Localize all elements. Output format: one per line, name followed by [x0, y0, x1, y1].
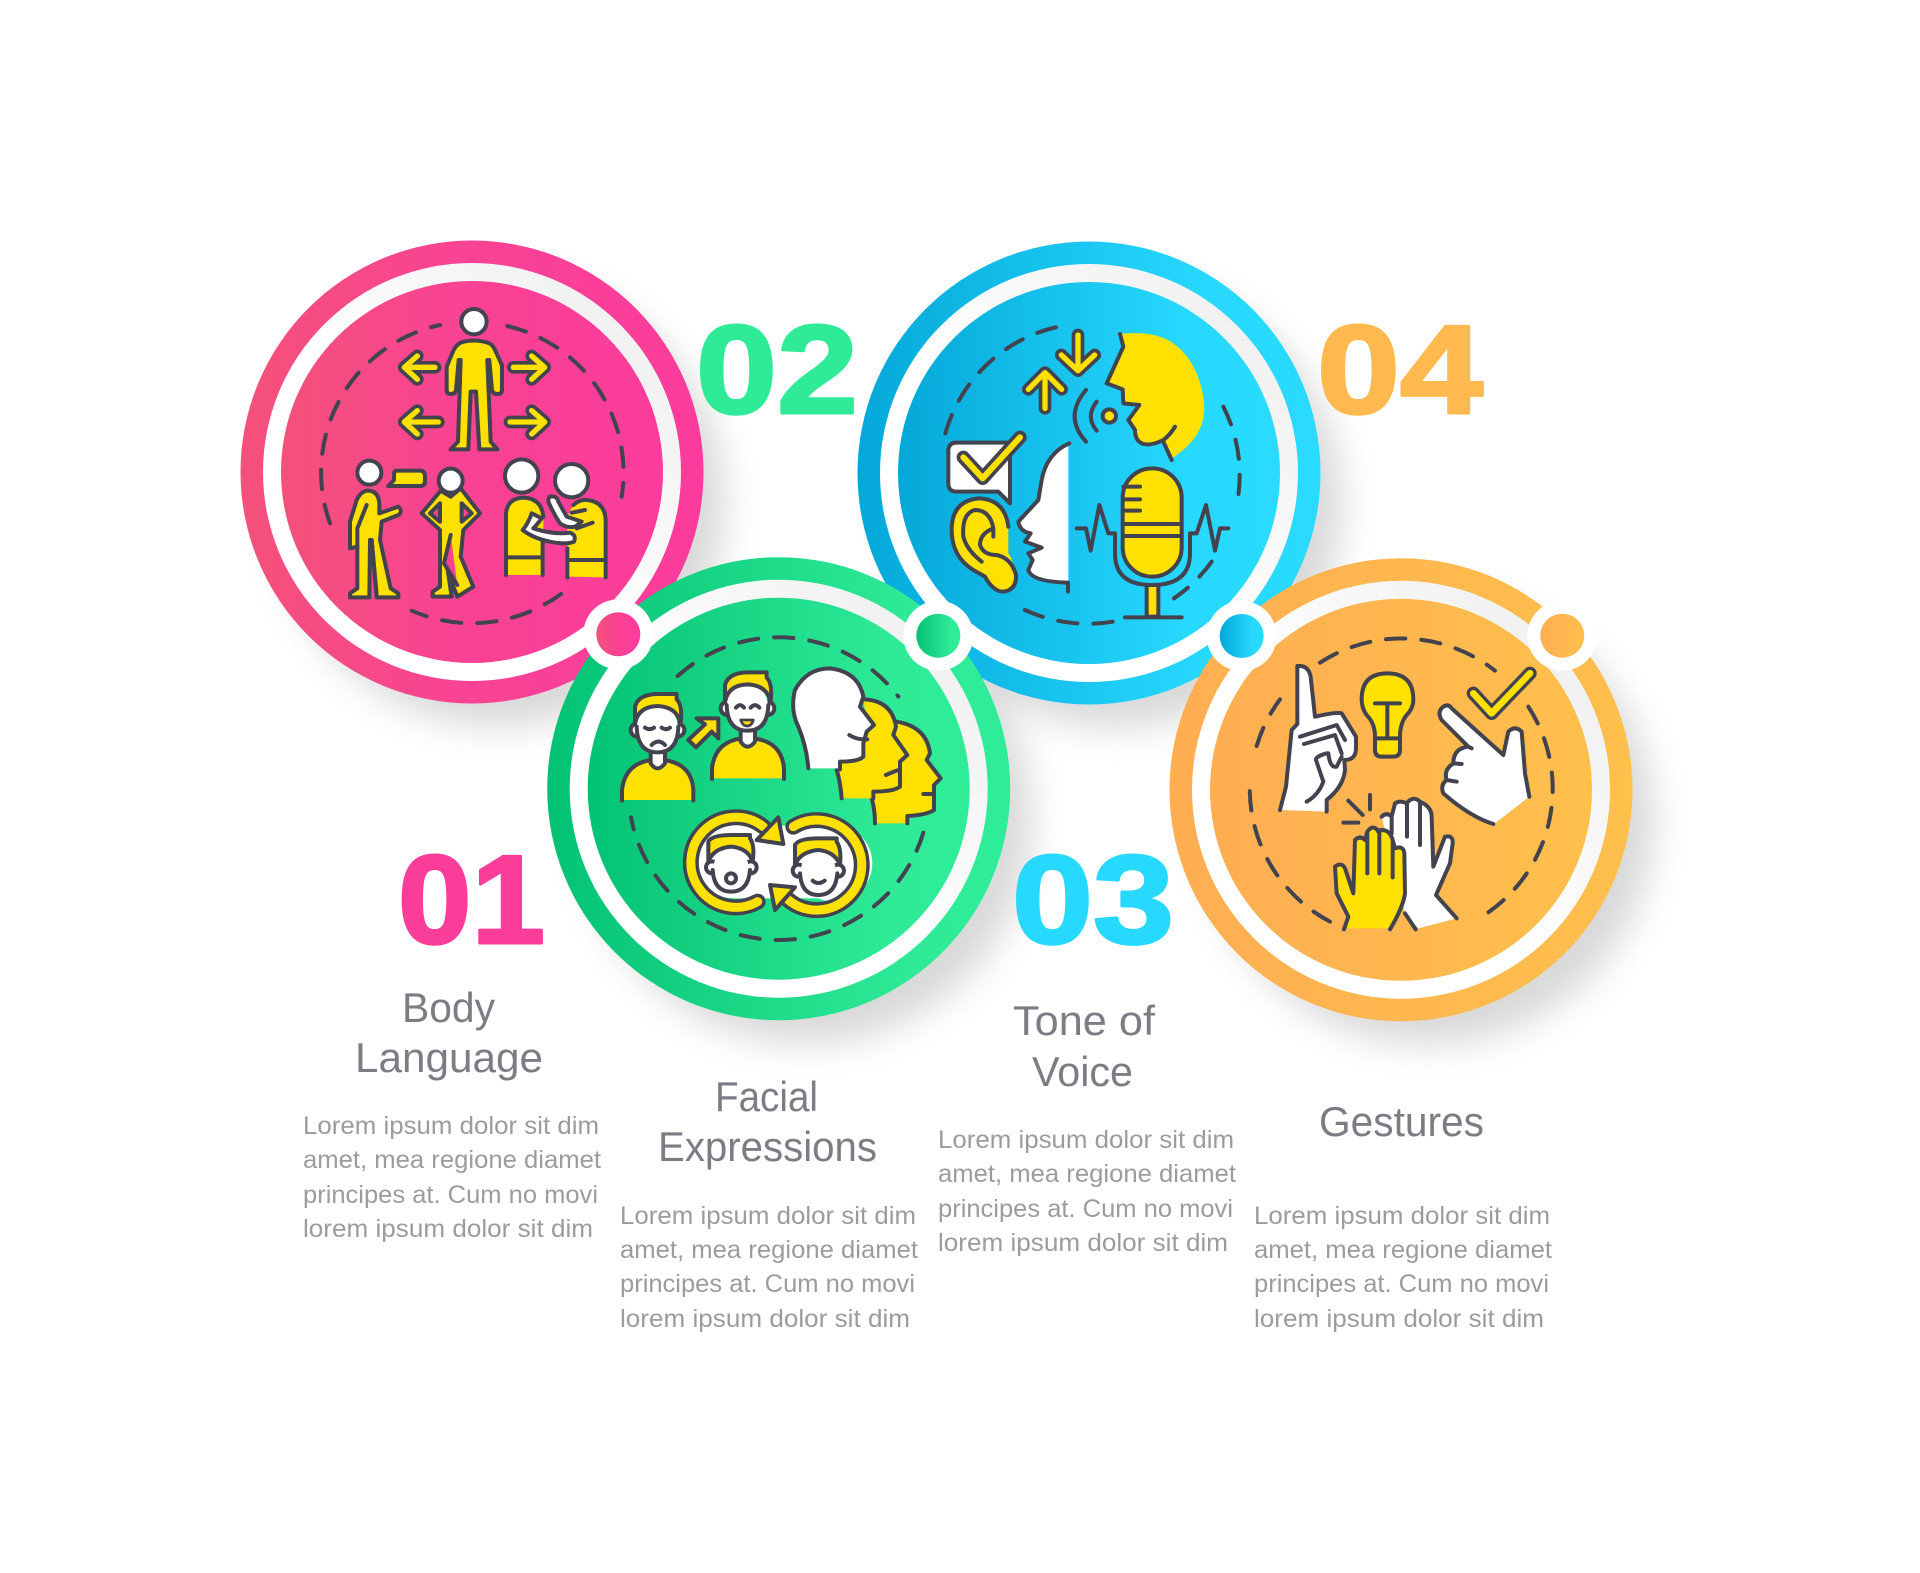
description: Gestures: Lorem ipsum dolor sit dim — [1254, 1202, 1550, 1230]
connector dot: orange — [1527, 601, 1597, 671]
text block: Body Language — [303, 984, 601, 1243]
description: Facial Expressions: Lorem ipsum dolor sit dim — [620, 1202, 916, 1230]
description: Gestures: principes at. Cum no movi — [1254, 1270, 1549, 1298]
heading: Tone of Voice — [1013, 997, 1155, 1095]
heading: Gestures: Gestures — [1319, 1098, 1484, 1145]
connector dot: green — [903, 601, 973, 671]
panel: facial expressions circle — [547, 557, 1010, 1020]
text block: Gestures — [1254, 1098, 1552, 1333]
icon: gestures hands — [1250, 638, 1553, 929]
heading: Tone of Voice: Voice — [1032, 1048, 1133, 1095]
connector dot: pink — [583, 599, 653, 669]
number 04: 04 — [1317, 299, 1483, 440]
heading: Facial Expressions — [658, 1073, 877, 1170]
number 03: 03 — [1012, 829, 1174, 970]
text block: Facial Expressions — [620, 1073, 918, 1333]
description: Tone of Voice — [938, 1126, 1236, 1257]
number 02: 02 — [696, 299, 858, 440]
description: Tone of Voice: amet, mea regione diamet — [938, 1160, 1236, 1188]
text block: Tone of Voice — [938, 997, 1236, 1257]
description: Facial Expressions — [620, 1202, 918, 1333]
heading: Body Language: Body — [402, 984, 495, 1031]
description: Body Language: Lorem ipsum dolor sit dim — [303, 1112, 599, 1140]
panel: body language circle — [240, 240, 704, 704]
icon: facial expressions figures — [622, 637, 941, 940]
description: Facial Expressions: lorem ipsum dolor sit dim — [620, 1305, 910, 1333]
description: Gestures: amet, mea regione diamet — [1254, 1236, 1552, 1264]
description: Body Language — [303, 1112, 601, 1243]
heading: Facial Expressions: Facial — [715, 1073, 818, 1120]
icon: body language figures — [321, 309, 624, 623]
description: Body Language: amet, mea regione diamet — [303, 1146, 601, 1174]
heading: Tone of Voice: Tone of — [1013, 997, 1155, 1044]
connector dot: blue — [1207, 601, 1277, 671]
heading: Body Language: Language — [355, 1034, 543, 1081]
panel: tone of voice circle — [858, 242, 1320, 704]
description: Gestures: lorem ipsum dolor sit dim — [1254, 1305, 1544, 1333]
description: Facial Expressions: principes at. Cum no movi — [620, 1270, 915, 1298]
description: Body Language: lorem ipsum dolor sit dim — [303, 1215, 593, 1243]
description: Tone of Voice: Lorem ipsum dolor sit dim — [938, 1126, 1234, 1154]
description: Tone of Voice: principes at. Cum no movi — [938, 1195, 1233, 1223]
description: Body Language: principes at. Cum no movi — [303, 1181, 598, 1209]
description: Facial Expressions: amet, mea regione diamet — [620, 1236, 918, 1264]
description: Tone of Voice: lorem ipsum dolor sit dim — [938, 1229, 1228, 1257]
heading: Facial Expressions: Expressions — [658, 1123, 877, 1170]
description: Gestures — [1254, 1202, 1552, 1333]
icon: tone of voice figures — [945, 326, 1240, 624]
number 01: 01 — [398, 829, 545, 970]
heading: Body Language — [355, 984, 543, 1081]
soft shadows behind circles — [275, 277, 1654, 1045]
panel: gestures circle — [1170, 558, 1632, 1021]
